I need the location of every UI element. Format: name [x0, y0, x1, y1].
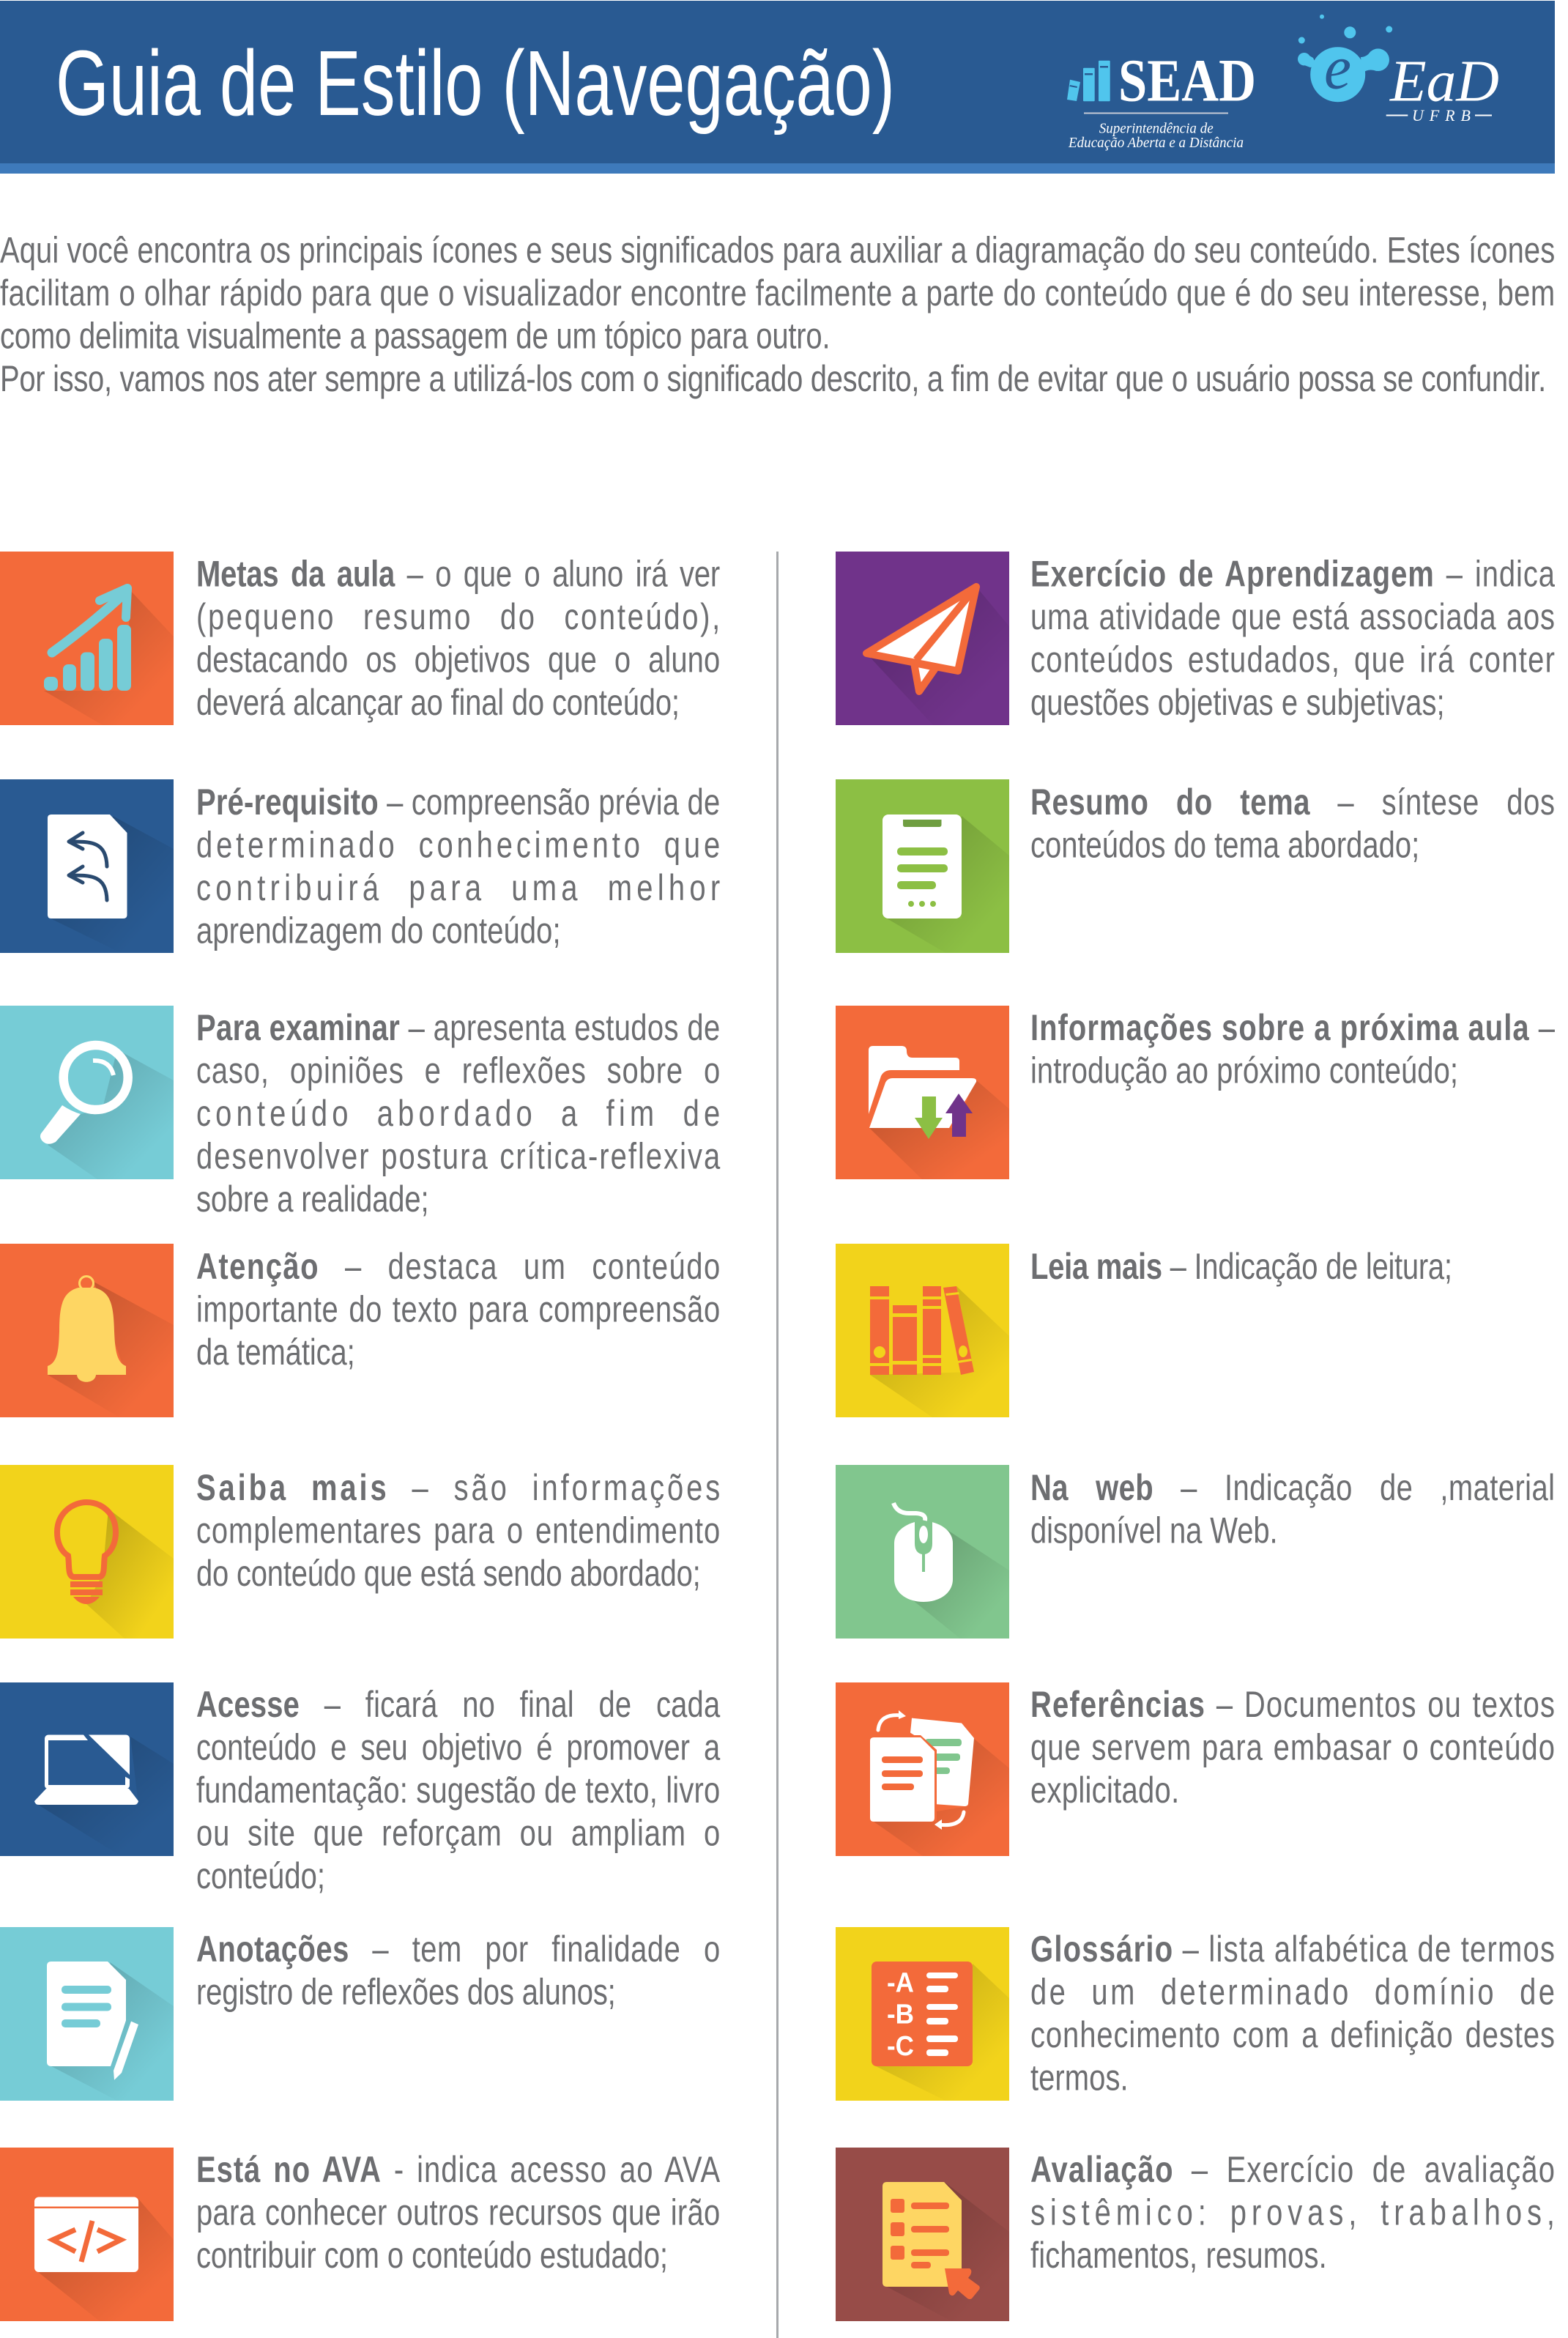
panel: Acesse — [0, 1682, 721, 1896]
text: Metas da aula: Metas da aula – o que o aluno irá ver — [196, 553, 720, 595]
text: Atenção: da temática; — [196, 1332, 355, 1373]
panel: Avaliação — [836, 2148, 1555, 2321]
panel: Resumo do tema — [836, 779, 1555, 953]
panel: Saiba mais — [0, 1465, 720, 1639]
icon: glossary A B C card: -A — [887, 1968, 914, 1999]
panel: Pré-requisito — [0, 779, 720, 953]
icon: folder with arrows — [836, 1006, 1009, 1179]
text: Avaliação: Avaliação – Exercício de avaliação — [1030, 2149, 1555, 2190]
panel: Atenção — [0, 1244, 720, 1417]
text: Para examinar — [196, 1007, 721, 1220]
text: Informações sobre a próxima aula: introdução ao próximo conteúdo; — [1030, 1050, 1458, 1091]
intro text — [0, 229, 1555, 399]
text: Está no AVA: para conhecer outros recursos que irão — [196, 2192, 720, 2233]
icon: laptop — [0, 1682, 174, 1856]
text: Pré-requisito: Pré-requisito – compreensão prévia de — [196, 782, 720, 823]
logo: SEAD: Superintendência de — [1099, 121, 1214, 137]
text: Para examinar: desenvolver postura crítica-reflexiva — [196, 1135, 721, 1177]
icon: magnifying glass — [0, 1006, 174, 1179]
text: Saiba mais — [196, 1467, 720, 1594]
text: Glossário: conhecimento com a definição destes — [1030, 2014, 1555, 2055]
text: Resumo do tema — [1030, 782, 1555, 866]
icon: document with arrows — [0, 779, 174, 953]
text: Pré-requisito: determinado conhecimento que — [196, 824, 720, 866]
text: Para examinar: caso, opiniões e reflexões sobre o — [196, 1050, 720, 1091]
panel: Está no AVA — [0, 2148, 721, 2321]
panel: Leia mais — [836, 1244, 1452, 1417]
text: Glossário: de um determinado domínio de — [1030, 1971, 1555, 2013]
text: Glossário — [1030, 1929, 1555, 2098]
text: Metas da aula: (pequeno resumo do conteúdo), — [196, 596, 720, 637]
text: Informações sobre a próxima aula: Informações sobre a próxima aula – — [1030, 1007, 1556, 1048]
text: Atenção: importante do texto para compreensão — [196, 1288, 720, 1330]
logo: SEAD — [1067, 47, 1256, 151]
text: Acesse — [196, 1684, 721, 1896]
text: Avaliação: fichamentos, resumos. — [1030, 2235, 1327, 2276]
panel: Anotações — [0, 1927, 720, 2101]
panel: Para examinar — [0, 1006, 721, 1220]
text: Acesse: Acesse – ficará no final de cada — [196, 1684, 721, 1725]
text: Exercício de Aprendizagem: questões objetivas e subjetivas; — [1030, 682, 1445, 723]
text: Referências: Referências – Documentos ou textos — [1030, 1684, 1555, 1725]
text: Resumo do tema: conteúdos do tema abordado; — [1030, 824, 1419, 866]
text: Está no AVA: Está no AVA - indica acesso ao AVA — [196, 2149, 721, 2190]
text: Saiba mais: Saiba mais – são informações — [196, 1467, 720, 1508]
text: Leia mais: Leia mais – Indicação de leitura; — [1030, 1246, 1452, 1287]
text: Exercício de Aprendizagem: conteúdos estudados, que irá conter — [1030, 639, 1555, 680]
text: Acesse: conteúdo; — [196, 1855, 325, 1896]
text: Exercício de Aprendizagem: uma atividade que está associada aos — [1030, 596, 1555, 637]
text: Resumo do tema: Resumo do tema – síntese dos — [1030, 782, 1555, 823]
text: Na web: Na web – Indicação de ,material — [1030, 1467, 1555, 1508]
text: Acesse: conteúdo e seu objetivo é promover a — [196, 1726, 721, 1768]
text: Avaliação — [1030, 2149, 1555, 2276]
text: Para examinar: conteúdo abordado a fim de — [196, 1093, 720, 1134]
text: Anotações: Anotações – tem por finalidade o — [196, 1929, 720, 1970]
icon: note with pencil — [0, 1927, 174, 2101]
icon: computer mouse — [836, 1465, 1009, 1639]
text: Anotações — [196, 1929, 720, 2013]
column divider — [776, 552, 779, 2338]
text: Referências: que servem para embasar o conteúdo — [1030, 1726, 1555, 1768]
text: Na web — [1030, 1467, 1555, 1551]
icon: books — [836, 1244, 1009, 1417]
icon: light bulb — [0, 1465, 174, 1639]
text: Pré-requisito — [196, 782, 720, 951]
icon: paper plane — [836, 552, 1009, 725]
text: Exercício de Aprendizagem — [1030, 553, 1556, 723]
text: Metas da aula — [196, 553, 720, 723]
panel: Na web — [836, 1465, 1555, 1639]
text: Atenção: Atenção – destaca um conteúdo — [196, 1246, 720, 1287]
text: Saiba mais: complementares para o entendimento — [196, 1510, 720, 1551]
text: Para examinar: sobre a realidade; — [196, 1179, 429, 1220]
icon: documents exchange — [836, 1682, 1009, 1856]
intro text: Aqui você encontra os principais ícones e seus significados para auxiliar a diagramação do seu conteúdo. Estes ícones — [0, 229, 1555, 271]
icon: evaluation sheet with cursor — [836, 2148, 1009, 2321]
text: Referências: explicitado. — [1030, 1770, 1179, 1811]
text: Glossário: Glossário – lista alfabética de termos — [1030, 1929, 1555, 1970]
icon: glossary A B C card: -C — [887, 2031, 914, 2062]
text: Pré-requisito: aprendizagem do conteúdo; — [196, 910, 561, 951]
text: Metas da aula: deverá alcançar ao final do conteúdo; — [196, 682, 680, 723]
intro text: facilitam o olhar rápido para que o visualizador encontre facilmente a parte do conteúdo que é do seu interesse, bem — [0, 272, 1555, 313]
text: Está no AVA: contribuir com o conteúdo estudado; — [196, 2235, 668, 2276]
text: Para examinar: Para examinar – apresenta estudos de — [196, 1007, 720, 1048]
panel: Referências — [836, 1682, 1555, 1856]
text: Informações sobre a próxima aula — [1030, 1007, 1556, 1091]
panel: Exercício de Aprendizagem — [836, 552, 1556, 725]
icon: glossary A B C card — [836, 1927, 1009, 2101]
text: Glossário: termos. — [1030, 2057, 1129, 2098]
text: Está no AVA — [196, 2149, 721, 2276]
text: Avaliação: sistêmico: provas, trabalhos, — [1030, 2192, 1555, 2233]
logo: EaD UFRB: EaD — [1389, 50, 1499, 114]
panel: Metas da aula — [0, 552, 720, 725]
panel: Informações sobre a próxima aula — [836, 1006, 1556, 1179]
text: Referências — [1030, 1684, 1555, 1811]
text: Na web: disponível na Web. — [1030, 1510, 1278, 1551]
intro text: Por isso, vamos nos ater sempre a utilizá-los com o significado descrito, a fim de evitar que o usuário possa se confundir. — [0, 358, 1546, 399]
logo: EaD UFRB — [1298, 15, 1499, 125]
logo: SEAD: Educação Aberta e a Distância — [1068, 135, 1244, 151]
title: Guia de Estilo (Navegação) — [56, 31, 895, 135]
text: Acesse: fundamentação: sugestão de texto, livro — [196, 1770, 720, 1811]
text: Pré-requisito: contribuirá para uma melhor — [196, 867, 720, 908]
text: Acesse: ou site que reforçam ou ampliam o — [196, 1812, 720, 1854]
intro text: como delimita visualmente a passagem de um tópico para outro. — [0, 315, 831, 357]
text: Exercício de Aprendizagem: Exercício de Aprendizagem – indica — [1030, 553, 1556, 595]
logo: EaD UFRB: U F R B — [1412, 106, 1471, 125]
logo: SEAD: SEAD — [1118, 47, 1256, 114]
text: Metas da aula: destacando os objetivos que o aluno — [196, 639, 720, 680]
text: Saiba mais: do conteúdo que está sendo abordado; — [196, 1553, 701, 1594]
icon: code window — [0, 2148, 174, 2321]
icon: bell — [0, 1244, 174, 1417]
text: Anotações: registro de reflexões dos alunos; — [196, 1971, 616, 2013]
icon: summary sheet — [836, 779, 1009, 953]
panel: Glossário — [836, 1927, 1555, 2101]
text: Atenção — [196, 1246, 720, 1373]
logo: EaD UFRB: e — [1324, 34, 1351, 103]
header band — [0, 1, 1555, 174]
icon: rising chart — [0, 552, 174, 725]
icon: glossary A B C card: -B — [887, 2000, 914, 2030]
